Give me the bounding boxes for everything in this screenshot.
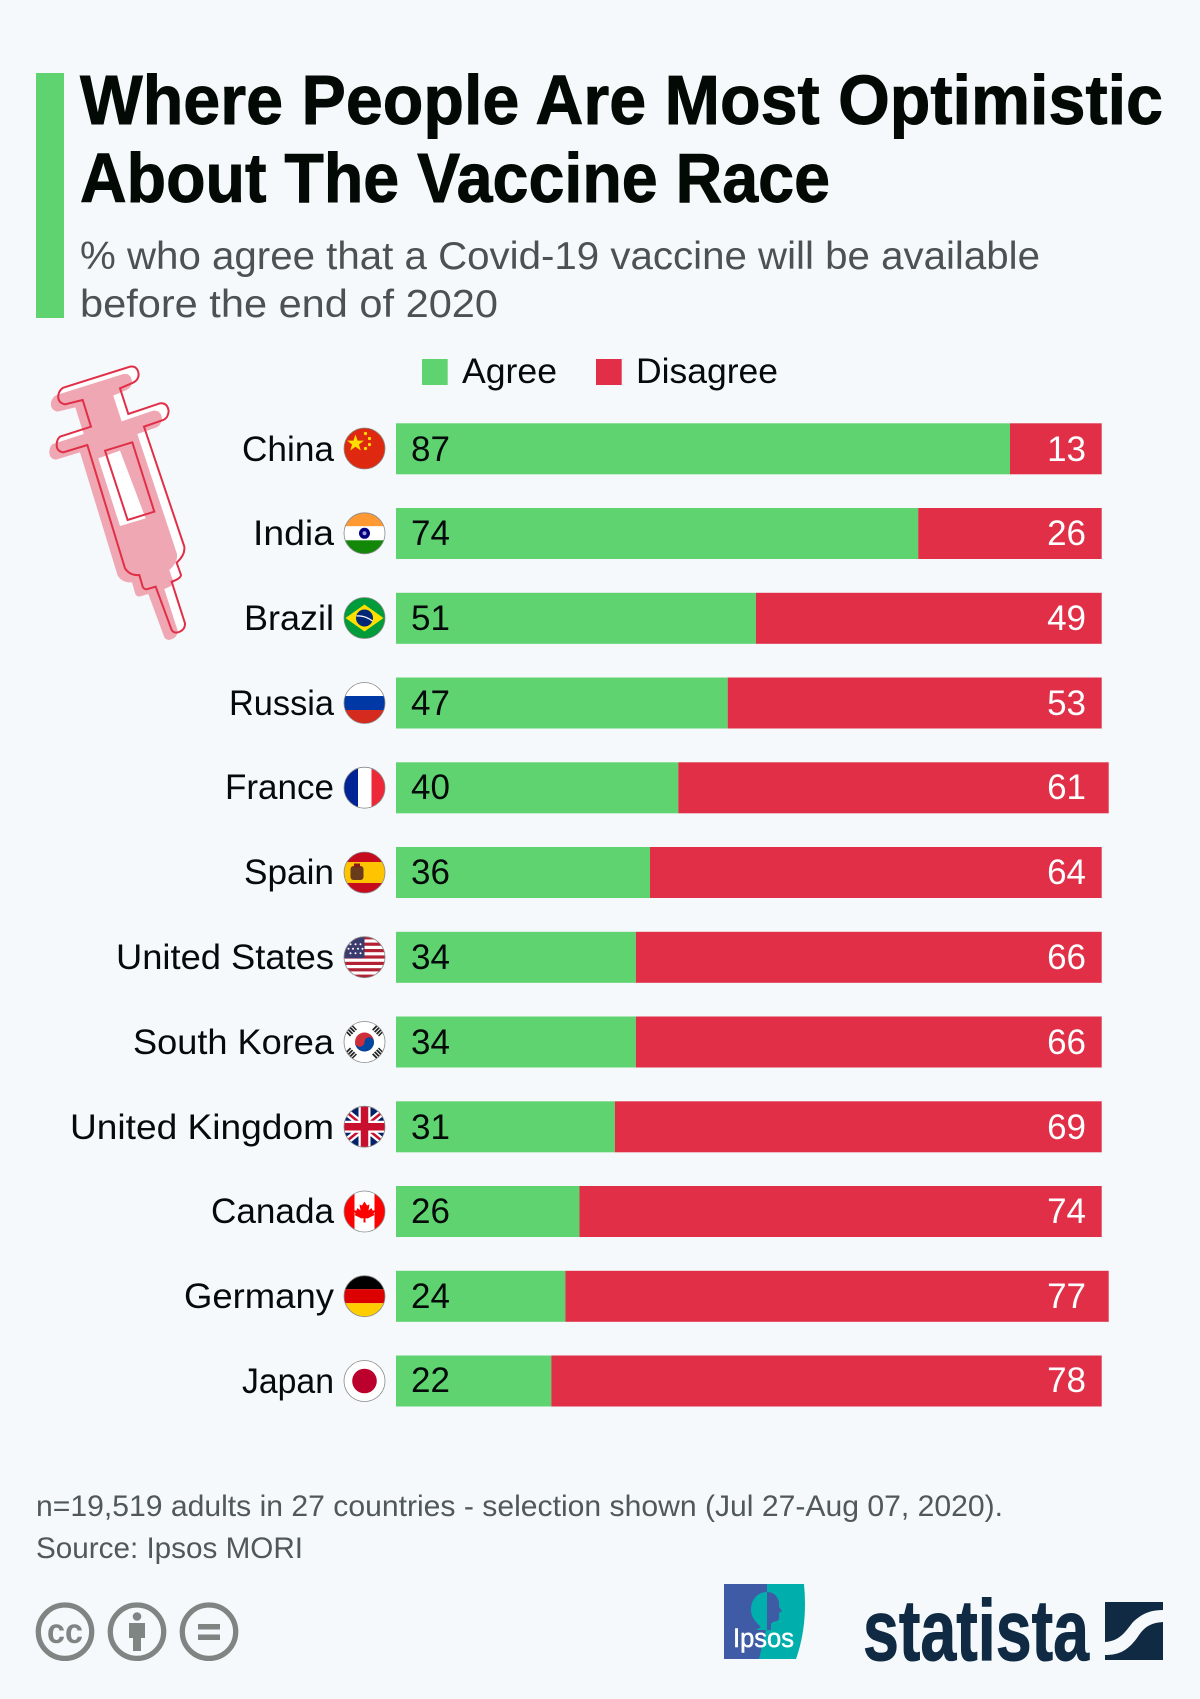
- row: Spain: [244, 847, 1102, 898]
- row: United Kingdom: [70, 1101, 1102, 1152]
- header: [36, 61, 1163, 326]
- row: Brazil: Brazil: [244, 599, 334, 638]
- row: Spain: Spain: [244, 853, 334, 892]
- row: Russia: [229, 678, 1102, 728]
- icon: cc: cc: [47, 1612, 83, 1651]
- row: Japan: 22: [411, 1361, 450, 1400]
- icon: syringe: [49, 366, 185, 640]
- row: Canada: 74: [1047, 1192, 1086, 1231]
- row: United Kingdom: United Kingdom: [70, 1108, 334, 1147]
- row: China: [242, 423, 1102, 474]
- subtitle: % who agree that a Covid-19 vaccine will be available: [80, 235, 1040, 278]
- row: India: 26: [1047, 514, 1086, 553]
- title: About The Vaccine Race: [80, 139, 830, 217]
- logo: Ipsos: Ipsos: [733, 1623, 794, 1653]
- row: South Korea: 34: [411, 1023, 450, 1062]
- row: South Korea: 66: [1047, 1023, 1086, 1062]
- row: United Kingdom: 69: [1047, 1108, 1086, 1147]
- source note: n=19,519 adults in 27 countries - selection shown (Jul 27-Aug 07, 2020).: [36, 1490, 1003, 1523]
- row: Canada: 26: [411, 1192, 450, 1231]
- row: India: 74: [411, 514, 450, 553]
- row: South Korea: South Korea: [133, 1023, 335, 1062]
- row: India: [253, 508, 1102, 559]
- row: Germany: [184, 1271, 1109, 1322]
- row: China: China: [242, 430, 335, 469]
- legend: disagree: Disagree: [636, 352, 778, 391]
- row: China: 87: [411, 430, 450, 469]
- row: United States: United States: [116, 938, 334, 977]
- row: France: 61: [1047, 768, 1086, 807]
- row: India: India: [253, 514, 335, 553]
- title: [80, 61, 1163, 217]
- title: Where People Are Most Optimistic: [80, 61, 1163, 139]
- row: Japan: [242, 1356, 1102, 1406]
- row: Brazil: 49: [1047, 599, 1086, 638]
- row: United States: 66: [1047, 938, 1086, 977]
- row: Brazil: [244, 593, 1102, 644]
- stacked bar chart: [70, 423, 1109, 1406]
- row: Germany: 24: [411, 1277, 450, 1316]
- row: Brazil: 51: [411, 599, 450, 638]
- subtitle: [80, 235, 1040, 326]
- row: Germany: 77: [1047, 1277, 1086, 1316]
- row: Japan: Japan: [242, 1362, 334, 1401]
- icon: attribution: [110, 1605, 164, 1658]
- row: Japan: 78: [1047, 1361, 1086, 1400]
- row: United Kingdom: 31: [411, 1108, 450, 1147]
- row: France: 40: [411, 768, 450, 807]
- row: Canada: [211, 1186, 1102, 1237]
- legend: [422, 352, 778, 391]
- row: France: [225, 762, 1109, 813]
- row: Spain: 64: [1047, 853, 1086, 892]
- source note: Source: Ipsos MORI: [36, 1532, 303, 1565]
- logo mark: [1105, 1602, 1163, 1660]
- creative commons icons: [38, 1605, 236, 1658]
- row: Russia: Russia: [229, 684, 335, 723]
- row: Russia: 47: [411, 684, 450, 723]
- icon: share alike: [182, 1605, 236, 1658]
- logo: Ipsos: [724, 1584, 805, 1659]
- row: China: 13: [1047, 430, 1086, 469]
- row: Canada: Canada: [211, 1192, 335, 1231]
- source note: [36, 1490, 1003, 1565]
- title accent bar: [36, 73, 64, 318]
- row: Russia: 53: [1047, 684, 1086, 723]
- row: Germany: Germany: [184, 1277, 335, 1316]
- subtitle: before the end of 2020: [80, 283, 498, 326]
- icon: cc: [38, 1605, 92, 1658]
- logo: statista: statista: [863, 1583, 1090, 1679]
- row: France: France: [225, 768, 334, 807]
- row: United States: [116, 932, 1102, 983]
- legend: agree: Agree: [462, 352, 557, 391]
- row: United States: 34: [411, 938, 450, 977]
- row: Spain: 36: [411, 853, 450, 892]
- row: South Korea: [133, 1016, 1102, 1068]
- legend: agree: [422, 352, 557, 391]
